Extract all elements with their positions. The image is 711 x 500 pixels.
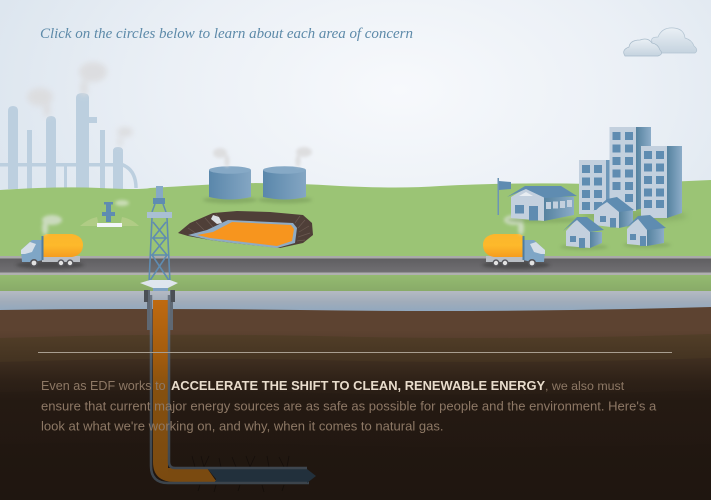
house centre [593, 197, 634, 228]
house right [623, 215, 671, 248]
intro paragraph [41, 378, 657, 434]
aquifer water layer [0, 291, 711, 313]
wellhead sprinkler [80, 200, 139, 227]
warehouse [507, 186, 579, 223]
city buildings [507, 127, 687, 250]
intro paragraph: Even as EDF works to [41, 379, 169, 393]
divider line [38, 352, 672, 353]
sky background [0, 0, 711, 200]
intro paragraph: ACCELERATE THE SHIFT TO CLEAN, RENEWABLE ENERGY [171, 378, 545, 393]
refinery smoke [27, 62, 133, 147]
centre tower [610, 127, 651, 211]
tank smoke [213, 147, 312, 167]
house left [560, 217, 608, 250]
icon: clouds [624, 28, 697, 56]
storage tanks [203, 147, 312, 204]
fracture lines [192, 456, 289, 492]
intro paragraph: look at what we're working on, and why, when it comes to natural gas. [41, 418, 444, 434]
flag [498, 178, 511, 215]
dark overlay behind text [0, 330, 711, 500]
drilling rig [140, 186, 178, 291]
instruction heading: Click on the circles below to learn about each area of concern [40, 26, 413, 42]
road [0, 256, 711, 275]
soil layers [0, 307, 711, 500]
refinery silhouette [0, 62, 136, 189]
well bore pipe [144, 290, 316, 484]
tanker truck left [16, 215, 84, 269]
intro paragraph: , we also must [545, 379, 625, 393]
left tower [579, 160, 610, 214]
wastewater pit [178, 211, 313, 248]
intro paragraph: ensure that current major energy sources are as safe as possible for people and the environment. Here's a [41, 398, 657, 414]
lower green strip [0, 275, 711, 292]
tanker truck right [482, 215, 550, 269]
right tower [641, 146, 682, 218]
green field [0, 180, 711, 258]
